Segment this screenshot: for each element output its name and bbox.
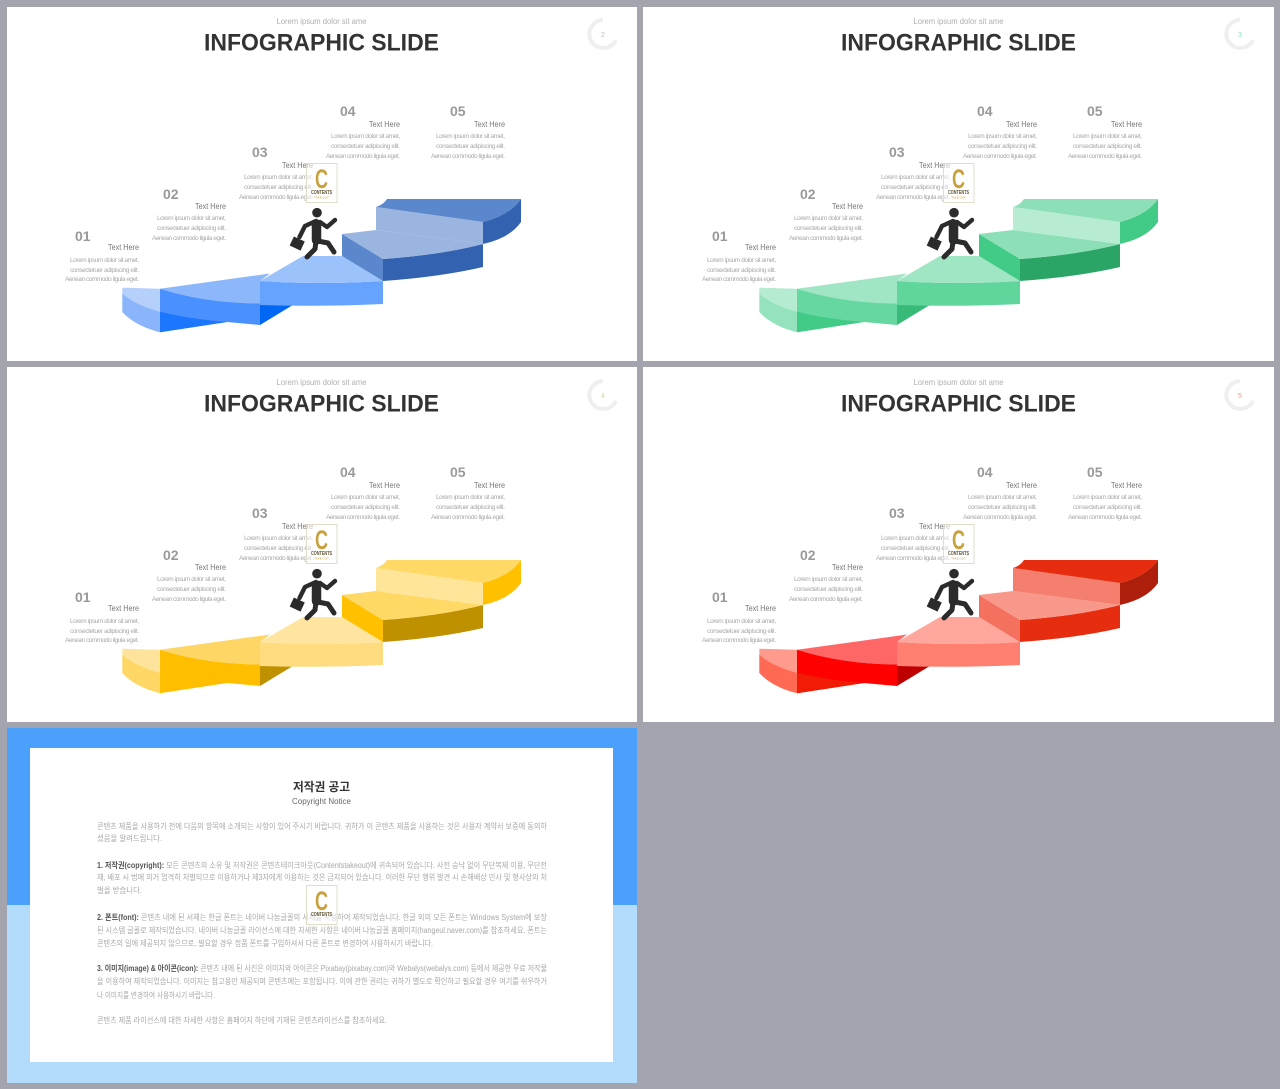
label 03: Text Here (919, 160, 950, 170)
label 02 (789, 547, 863, 603)
label 03: Text Here (282, 160, 313, 170)
watermark logo: CONTENTS (311, 912, 333, 918)
subtitle: Lorem ipsum dolor sit ame (276, 377, 367, 387)
panel: green slide (643, 7, 1274, 361)
label 04: Lorem ipsum dolor sit amet, (331, 133, 400, 140)
label 02: 02 (800, 547, 816, 563)
label 03: 03 (252, 144, 268, 160)
label 02: Text Here (195, 562, 226, 572)
label 05: Aenean commodo ligula eget. (431, 514, 505, 521)
label 02: Lorem ipsum dolor sit amet, (157, 576, 226, 583)
label 03: 03 (252, 505, 268, 521)
label 05: 05 (1087, 103, 1103, 119)
label 02 (789, 186, 863, 242)
subtitle: Lorem ipsum dolor sit ame (276, 16, 367, 26)
watermark logo: C (315, 525, 328, 555)
label 04: Aenean commodo ligula eget. (963, 514, 1037, 521)
intro paragraph: 셨음을 알려드립니다. (97, 833, 162, 843)
label 04: consectetuer adipiscing elit. (331, 143, 400, 150)
label 02: 02 (163, 186, 179, 202)
label 03: Lorem ipsum dolor sit amet, (244, 174, 313, 181)
label 02: Aenean commodo ligula eget. (789, 596, 863, 603)
label 01: Aenean commodo ligula eget. (702, 276, 776, 283)
label 05: Text Here (1111, 119, 1142, 129)
paragraph 3: image and icon: 3. 이미지(image) & 아이콘(icon): 콘텐츠 내에 된 사진은 이미지와 아이콘은 Pixabay(pixabay.com)와 Webalys(webalys.com) 등에서 제공한 무료 저작물 (97, 963, 547, 973)
copyright heading: 저작권 공고 (293, 779, 350, 794)
label 01: 01 (712, 228, 728, 244)
label 02: consectetuer adipiscing elit. (794, 225, 863, 232)
label 03: consectetuer adipiscing elit. (244, 545, 313, 552)
stair chart (122, 199, 521, 332)
watermark logo: CONTENTS (311, 190, 333, 196)
paragraph 2: font (97, 912, 548, 948)
label 03: Lorem ipsum dolor sit amet, (881, 535, 950, 542)
watermark logo: TAKE OUT (951, 196, 966, 200)
label 04: consectetuer adipiscing elit. (968, 504, 1037, 511)
label 04: Aenean commodo ligula eget. (963, 153, 1037, 160)
label 04: Aenean commodo ligula eget. (326, 153, 400, 160)
watermark logo (944, 164, 974, 202)
label 01: Aenean commodo ligula eget. (65, 637, 139, 644)
label 05: consectetuer adipiscing elit. (436, 143, 505, 150)
page number ring: 4 (601, 393, 605, 400)
label 02 (152, 186, 226, 242)
label 04 (326, 103, 400, 160)
page number ring (589, 381, 616, 409)
label 05: Lorem ipsum dolor sit amet, (436, 133, 505, 140)
paragraph 2: font: 된 시스템 글꼴로 제작되었습니다. 네이버 나눔글꼴 라이선스에 대한 자세한 사항은 네이버 나눔글꼴 홈페이지(hangeul.naver.com)를 참조하세요. 폰트는 (97, 925, 547, 935)
label 03: consectetuer adipiscing elit. (244, 184, 313, 191)
label 03 (876, 505, 950, 562)
title: INFOGRAPHIC SLIDE (841, 30, 1076, 56)
label 01: Lorem ipsum dolor sit amet, (70, 257, 139, 264)
label 02: Aenean commodo ligula eget. (789, 235, 863, 242)
panel: blue slide (7, 7, 637, 361)
label 01 (702, 589, 776, 644)
label 03: Lorem ipsum dolor sit amet, (244, 535, 313, 542)
label 03 (239, 505, 313, 562)
label 04: consectetuer adipiscing elit. (968, 143, 1037, 150)
label 04: Lorem ipsum dolor sit amet, (968, 494, 1037, 501)
label 05: Text Here (474, 480, 505, 490)
label 02: Aenean commodo ligula eget. (152, 596, 226, 603)
label 02: Lorem ipsum dolor sit amet, (157, 215, 226, 222)
subtitle: Lorem ipsum dolor sit ame (914, 16, 1004, 26)
paragraph 1: copyright: 벌을 받습니다. (97, 885, 142, 895)
label 04 (963, 103, 1037, 160)
label 05: 05 (450, 464, 466, 480)
stair chart (122, 560, 521, 693)
label 05: Text Here (1111, 480, 1142, 490)
label 03 (876, 144, 950, 201)
paragraph 1: copyright: 1. 저작권(copyright): 모든 콘텐츠의 소유 및 저작권은 콘텐츠테이크아웃(Contentstakeout)에 귀속되어 있습니다. 사전 승낙 없이 무단복제 이용, 무단전 (97, 860, 547, 870)
label 02: consectetuer adipiscing elit. (157, 225, 226, 232)
label 05: Aenean commodo ligula eget. (431, 153, 505, 160)
label 03: Text Here (919, 521, 950, 531)
label 01: consectetuer adipiscing elit. (70, 628, 139, 635)
label 01 (65, 589, 139, 644)
paragraph 3: image and icon: 을 이용하여 제작되었습니다. 이미지는 참고용만 제공되며 콘텐츠에는 포함됩니다. 이에 관한 권리는 귀하가 별도로 확인하고 필요할 경우 여기를 쉬우하거 (97, 976, 547, 986)
intro paragraph: 콘텐츠 제품을 사용하기 전에 다음의 항목에 소개되는 사항이 있어 주시기 바랍니다. 귀하가 이 콘텐츠 제품을 사용하는 것은 사용자 계약서 보증에 동의하 (97, 821, 548, 831)
label 05: consectetuer adipiscing elit. (1073, 143, 1142, 150)
label 02: 02 (800, 186, 816, 202)
label 01: 01 (75, 589, 91, 605)
watermark logo (306, 886, 337, 924)
panel: yellow slide (7, 367, 637, 722)
label 03: 03 (889, 144, 905, 160)
label 05 (1068, 103, 1142, 160)
label 05: 05 (1087, 464, 1103, 480)
label 03: consectetuer adipiscing elit. (881, 184, 950, 191)
intro paragraph (97, 821, 548, 843)
icon: running businessman (927, 208, 972, 257)
label 02: Lorem ipsum dolor sit amet, (794, 576, 863, 583)
panel: red slide (643, 367, 1274, 722)
title: INFOGRAPHIC SLIDE (204, 30, 439, 56)
label 01: Text Here (108, 603, 139, 613)
watermark logo: TAKE OUT (951, 556, 966, 560)
paragraph 2: font: 콘텐츠의 일에 제공되지 않으므로, 필요할 경우 정품 폰트를 구입하셔서 다른 폰트로 변경하여 사용하시기 바랍니다. (97, 938, 433, 948)
label 01: consectetuer adipiscing elit. (707, 267, 776, 274)
icon: running businessman (290, 569, 335, 618)
label 03: Aenean commodo ligula eget. (239, 194, 313, 201)
label 05: Lorem ipsum dolor sit amet, (436, 494, 505, 501)
page number ring: 5 (1238, 393, 1242, 400)
label 04: Lorem ipsum dolor sit amet, (968, 133, 1037, 140)
watermark logo: C (315, 886, 328, 916)
label 01: Text Here (745, 603, 776, 613)
label 04: 04 (977, 464, 993, 480)
paragraph 1: copyright (97, 860, 547, 895)
page number ring (1226, 20, 1253, 48)
page number ring: 2 (601, 32, 605, 39)
page number ring (589, 20, 616, 48)
label 04: consectetuer adipiscing elit. (331, 504, 400, 511)
icon: running businessman (927, 569, 972, 618)
paragraph 3: image and icon: 나 이미지를 변경하여 사용하시기 바랍니다. (97, 990, 215, 1000)
page number ring (1226, 381, 1253, 409)
page number ring: 3 (1238, 32, 1242, 39)
watermark logo: CONTENTS (311, 551, 333, 557)
watermark logo: CONTENTS (948, 190, 970, 196)
label 05: 05 (450, 103, 466, 119)
label 04: Lorem ipsum dolor sit amet, (331, 494, 400, 501)
label 04 (963, 464, 1037, 521)
label 04 (326, 464, 400, 521)
label 05 (431, 103, 505, 160)
stair chart (759, 199, 1158, 332)
label 02: Text Here (832, 201, 863, 211)
label 01: Text Here (108, 242, 139, 252)
label 03: Aenean commodo ligula eget. (239, 555, 313, 562)
label 03: 03 (889, 505, 905, 521)
title: INFOGRAPHIC SLIDE (841, 390, 1076, 418)
label 03: Aenean commodo ligula eget. (876, 555, 950, 562)
copyright subheading: Copyright Notice (292, 796, 351, 806)
label 02: consectetuer adipiscing elit. (157, 586, 226, 593)
label 02: Aenean commodo ligula eget. (152, 235, 226, 242)
label 03: Text Here (282, 521, 313, 531)
label 05: Text Here (474, 119, 505, 129)
label 03: Aenean commodo ligula eget. (876, 194, 950, 201)
label 01: 01 (75, 228, 91, 244)
label 05: consectetuer adipiscing elit. (436, 504, 505, 511)
label 01 (702, 228, 776, 283)
label 02: Lorem ipsum dolor sit amet, (794, 215, 863, 222)
label 01: Lorem ipsum dolor sit amet, (707, 257, 776, 264)
watermark logo (306, 524, 337, 564)
stair chart (759, 560, 1158, 693)
label 01: consectetuer adipiscing elit. (707, 628, 776, 635)
label 04: Text Here (1006, 119, 1037, 129)
paragraph 2: font: 2. 폰트(font): 콘텐츠 내에 된 서체는 한글 폰트는 네이버 나눔글꼴의 서체를 사용하여 제작되었습니다. 한글 외의 모든 폰트는 Windows System에 보장 (97, 912, 548, 922)
label 05: Lorem ipsum dolor sit amet, (1073, 133, 1142, 140)
label 01: Aenean commodo ligula eget. (65, 276, 139, 283)
label 04: Text Here (369, 119, 400, 129)
label 05 (431, 464, 505, 521)
watermark logo: C (315, 164, 328, 194)
subtitle: Lorem ipsum dolor sit ame (914, 377, 1004, 387)
watermark logo: C (952, 525, 965, 555)
watermark logo (306, 164, 337, 202)
label 05 (1068, 464, 1142, 521)
icon: running businessman (290, 208, 335, 257)
panel: copyright notice (7, 728, 637, 1083)
label 05: Aenean commodo ligula eget. (1068, 153, 1142, 160)
label 02: Text Here (832, 562, 863, 572)
label 01: Lorem ipsum dolor sit amet, (70, 618, 139, 625)
label 05: Lorem ipsum dolor sit amet, (1073, 494, 1142, 501)
closing note: 콘텐츠 제품 라이선스에 대한 자세한 사항은 홈페이지 하단에 기재된 콘텐츠라이선스를 참조하세요. (97, 1015, 387, 1025)
paragraph 1: copyright: 재, 배포 시 법에 의거 엄격히 처벌되므로 이용하거나 제3자에게 이용하는 것은 금지되어 있습니다. 이러한 무단 행위 발견 시 손해배상 민사 및 형사상의 처 (97, 872, 547, 882)
label 02: Text Here (195, 201, 226, 211)
label 02: 02 (163, 547, 179, 563)
paragraph 3: image and icon (97, 963, 547, 1000)
label 04: 04 (977, 103, 993, 119)
title: INFOGRAPHIC SLIDE (204, 390, 439, 418)
watermark logo: CONTENTS (948, 551, 970, 557)
label 01: Lorem ipsum dolor sit amet, (707, 618, 776, 625)
label 01: consectetuer adipiscing elit. (70, 267, 139, 274)
watermark logo: TAKE OUT (314, 196, 329, 200)
watermark logo (944, 524, 974, 564)
label 05: consectetuer adipiscing elit. (1073, 504, 1142, 511)
label 03: Lorem ipsum dolor sit amet, (881, 174, 950, 181)
label 04: Text Here (1006, 480, 1037, 490)
label 03 (239, 144, 313, 201)
watermark logo: C (952, 164, 965, 194)
label 04: 04 (340, 103, 356, 119)
label 04: Text Here (369, 480, 400, 490)
label 04: Aenean commodo ligula eget. (326, 514, 400, 521)
label 04: 04 (340, 464, 356, 480)
label 01: Text Here (745, 242, 776, 252)
label 03: consectetuer adipiscing elit. (881, 545, 950, 552)
label 01: Aenean commodo ligula eget. (702, 637, 776, 644)
label 01: 01 (712, 589, 728, 605)
watermark logo: TAKE OUT (314, 556, 329, 560)
label 05: Aenean commodo ligula eget. (1068, 514, 1142, 521)
label 01 (65, 228, 139, 283)
label 02: consectetuer adipiscing elit. (794, 586, 863, 593)
label 02 (152, 547, 226, 603)
